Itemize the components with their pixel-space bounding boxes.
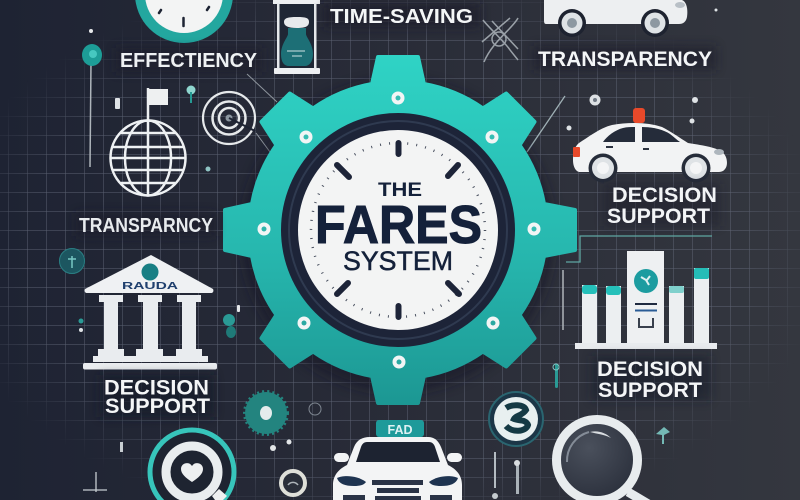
label: decision support lower right: DECISION: [597, 357, 703, 381]
icon: teal flower badge: [245, 392, 287, 434]
icon: bank temple: [83, 255, 217, 370]
clock hour marks: [337, 143, 459, 317]
icon: teal pin: [82, 29, 102, 167]
icon: globe with flag: [110, 88, 186, 196]
icon: check badge: [489, 392, 543, 446]
clock minute ticks: [311, 143, 485, 317]
icon: faint teal orb: [59, 248, 85, 274]
label: decision support lower right: [592, 356, 710, 402]
label: decision support upper right: SUPPORT: [607, 205, 710, 228]
label: time-saving: TIME-SAVING: [330, 5, 473, 28]
title: the fares system: THE: [378, 180, 422, 201]
label: efficiency: EFFECTIENCY: [120, 49, 257, 72]
icon: front-view taxi: FAD: [388, 423, 412, 437]
clock bezel: [281, 113, 515, 347]
label: decision support lower right: SUPPORT: [598, 378, 702, 402]
icon: top clock: [135, 0, 233, 43]
icon: top-right car: [544, 0, 687, 37]
title: the fares system: SYSTEM: [343, 246, 453, 276]
icon: front-view taxi: [333, 420, 462, 500]
label: decision support upper right: DECISION: [612, 184, 717, 207]
title: the fares system: FARES: [315, 195, 482, 255]
icon: magnifying glass: [556, 420, 650, 500]
label: decision support lower left: [100, 375, 214, 418]
icon: heart target: [150, 430, 234, 500]
title: the fares system: [315, 180, 482, 276]
icon: target: [203, 92, 255, 144]
icon: hourglass: [273, 0, 320, 74]
label: transparency right: TRANSPARENCY: [538, 47, 712, 71]
label: decision support upper right: [604, 184, 720, 228]
label: decision support lower left: SUPPORT: [105, 394, 210, 418]
icon: bank temple: RAUDA: [122, 281, 178, 292]
gear bolts: [258, 92, 540, 368]
label: decision support lower left: DECISION: [104, 376, 209, 400]
label: transparency left: TRANSPARNCY: [79, 215, 214, 237]
icon: knot: [482, 18, 518, 62]
icon: police car: [573, 108, 727, 182]
central gear: [225, 57, 575, 403]
gear body with eight teeth: [225, 57, 575, 403]
icon: small ring: [281, 471, 305, 495]
clock face: [298, 130, 498, 330]
icon: bar chart: [575, 251, 717, 349]
connector lines: [247, 74, 712, 330]
small decorative marks: [78, 8, 718, 499]
